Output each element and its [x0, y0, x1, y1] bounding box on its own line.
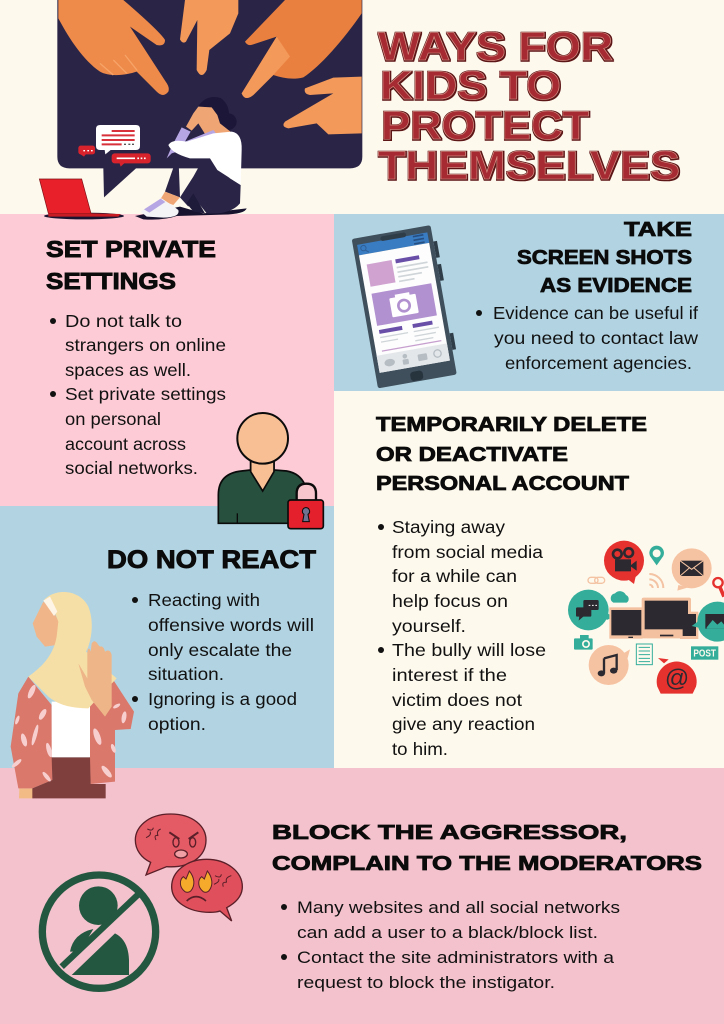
red video bubble	[604, 541, 644, 584]
text block: set private settings bullets: social networks.	[65, 458, 198, 478]
text block: delete account bullets	[378, 517, 546, 759]
heading: take screen shots: TAKE	[624, 219, 692, 241]
heading: take screen shots: AS EVIDENCE	[540, 275, 692, 297]
text block: set private settings bullets	[50, 311, 226, 478]
hand: right side	[283, 77, 362, 134]
text block: screen shots bullet: enforcement agencies.	[505, 353, 692, 373]
document	[636, 644, 652, 665]
text block: delete account bullets: from social media	[392, 542, 543, 562]
text block: delete account bullets: Staying away	[392, 517, 505, 537]
hand: top left	[58, 0, 169, 95]
flaming eyes bubble	[172, 859, 242, 921]
chat bubble teal	[568, 590, 615, 630]
text block: screen shots bullet: Evidence can be useful if	[493, 303, 698, 323]
icon: smartphone showing a page	[352, 224, 460, 388]
text block: set private settings bullets: strangers on online	[65, 335, 226, 355]
hijab	[28, 592, 117, 708]
text block: screen shots bullet	[476, 303, 698, 373]
chain link	[588, 577, 605, 583]
heading: block the aggressor: COMPLAIN TO THE MODERATORS	[272, 853, 702, 875]
panel: set private settings	[0, 214, 334, 506]
text block: do not react bullets: situation.	[148, 664, 224, 684]
text block: do not react bullets: only escalate the	[148, 640, 292, 660]
title	[378, 25, 680, 188]
icon: blocked user	[42, 875, 156, 988]
laptop	[39, 179, 124, 219]
text block: delete account bullets: for a while can	[392, 566, 517, 586]
chat bubbles	[78, 125, 151, 167]
text block: delete account bullets: victim does not	[392, 690, 522, 710]
text block: set private settings bullets: spaces as well.	[65, 360, 191, 380]
post tag: POST	[693, 649, 716, 660]
panel: block the aggressor	[0, 768, 724, 1024]
speech bubble backdrop	[57, 0, 362, 197]
angry bubble top	[135, 814, 206, 875]
heading: block the aggressor	[272, 822, 702, 875]
heading: take screen shots: SCREEN SHOTS	[517, 247, 692, 269]
hand: top centre	[180, 0, 238, 75]
text block: delete account bullets: interest if the	[392, 665, 507, 685]
group of screens	[609, 598, 698, 639]
text block: do not react bullets: offensive words will	[148, 615, 314, 635]
panel: do not react	[0, 506, 334, 768]
heading: take screen shots	[517, 219, 692, 297]
text block: set private settings bullets: account across	[65, 434, 186, 454]
heading: set private settings	[46, 236, 216, 294]
illustration: pointing hands and chat	[39, 0, 362, 219]
music bubble	[589, 645, 630, 685]
illustration: girl sitting with head in hands	[135, 97, 247, 220]
text block: set private settings bullets: on personal	[65, 409, 161, 429]
illustration: woman in hijab raising hand	[11, 592, 134, 798]
text block: set private settings bullets: Do not talk to	[65, 311, 182, 331]
text block: delete account bullets: to him.	[392, 739, 448, 759]
heading: temporarily delete or deactivate	[376, 414, 647, 495]
location pin	[649, 546, 664, 565]
text block: delete account bullets: give any reaction	[392, 714, 535, 734]
camera	[574, 635, 593, 650]
red magnifier	[713, 578, 724, 597]
heading: set private settings: SET PRIVATE	[46, 236, 216, 262]
title: PROTECT	[381, 104, 589, 148]
icon: angry speech bubbles	[135, 814, 242, 921]
text block: set private settings bullets: Set private settings	[65, 384, 226, 404]
text block: do not react bullets	[132, 590, 314, 734]
jacket	[11, 677, 134, 798]
text block: do not react bullets: option.	[148, 714, 206, 734]
panel: screen shots	[334, 214, 724, 391]
title: WAYS FOR	[378, 25, 613, 69]
raised hand	[78, 641, 112, 717]
cloud	[611, 591, 629, 603]
text block: delete account bullets: The bully will lose	[392, 640, 546, 660]
heading: set private settings: SETTINGS	[46, 268, 176, 294]
heading: temporarily delete or deactivate: TEMPORARILY DELETE	[376, 414, 647, 436]
heading: block the aggressor: BLOCK THE AGGRESSOR,	[272, 822, 627, 844]
icon: person with padlock	[218, 413, 323, 529]
at sign bubble	[657, 658, 697, 694]
heading: temporarily delete or deactivate: OR DEACTIVATE	[376, 444, 568, 466]
title: KIDS TO	[380, 64, 561, 108]
text block: block the aggressor bullets	[281, 899, 620, 992]
icon cluster: social media and devices	[568, 541, 724, 694]
rss waves	[649, 574, 663, 588]
text block: delete account bullets: yourself.	[392, 616, 466, 636]
picture bubble teal	[692, 602, 724, 642]
text block: screen shots bullet: you need to contact law	[494, 328, 698, 348]
text block: do not react bullets: Reacting with	[148, 590, 260, 610]
text block: do not react bullets: Ignoring is a good	[148, 689, 297, 709]
text block: delete account bullets: help focus on	[392, 591, 508, 611]
face	[33, 602, 60, 647]
heading: do not react: DO NOT REACT	[107, 546, 316, 574]
at sign bubble: @	[665, 665, 689, 692]
text block: block the aggressor bullets: can add a user to a black/block list.	[297, 924, 598, 942]
text block: block the aggressor bullets: Contact the site administrators with a	[297, 949, 615, 967]
envelope bubble	[672, 548, 712, 591]
heading: temporarily delete or deactivate: PERSONAL ACCOUNT	[376, 473, 629, 495]
text block: block the aggressor bullets: Many websites and all social networks	[297, 899, 620, 917]
text block: block the aggressor bullets: request to block the instigator.	[297, 974, 555, 992]
hand: top right	[242, 0, 362, 98]
title: THEMSELVES	[378, 144, 680, 188]
